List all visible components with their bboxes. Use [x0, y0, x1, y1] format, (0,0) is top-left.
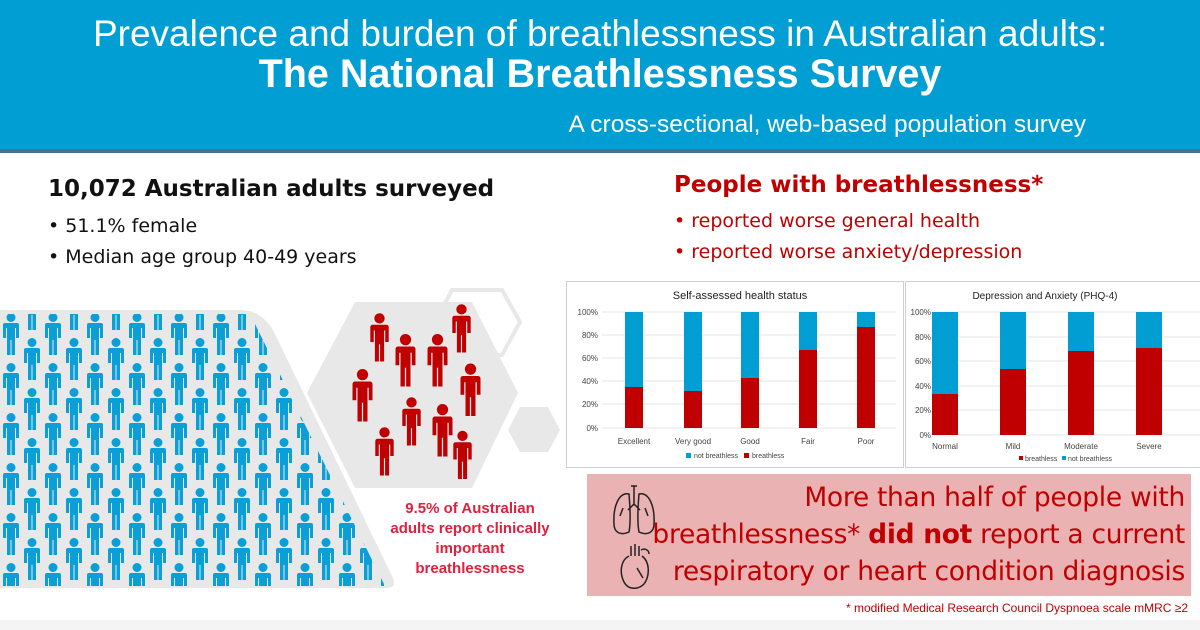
title: Prevalence and burden of breathlessness in Australian adults:: [93, 13, 1107, 54]
chart: depression and anxiety: 20%: [915, 406, 931, 415]
callout: 9.5%: breathlessness: [415, 560, 525, 577]
chart: depression and anxiety: Normal: [932, 442, 958, 451]
chart: depression and anxiety: 0%: [919, 431, 931, 440]
chart: self-assessed health status: Self-assessed health status: [673, 290, 808, 302]
callout: 9.5%: important: [435, 540, 505, 557]
icon: lungs: [613, 485, 655, 534]
text block: survey sample: [48, 176, 494, 268]
chart: self-assessed health status: Excellent: [618, 437, 651, 446]
crowd illustration: [0, 288, 560, 588]
icon: heart: [620, 544, 650, 589]
chart: depression and anxiety: Severe: [1136, 442, 1162, 451]
text block: survey sample: • 51.1% female: [48, 215, 197, 237]
chart: depression and anxiety: Mild: [1006, 442, 1020, 451]
red figures: [352, 304, 480, 479]
chart: self-assessed health status: breathless: [752, 453, 785, 460]
chart: depression and anxiety: 100%: [911, 308, 931, 317]
text block: survey sample: • Median age group 40-49 years: [48, 246, 357, 268]
chart: self-assessed health status: 40%: [582, 377, 598, 386]
chart: depression and anxiety: 80%: [915, 333, 931, 342]
subtitle: A cross-sectional, web-based population survey: [568, 111, 1086, 138]
chart: self-assessed health status: [566, 281, 904, 468]
callout text: breathlessness* did not report a current: [652, 519, 1185, 550]
blue figures: [0, 314, 385, 586]
footnote: * modified Medical Research Council Dyspnoea scale mMRC ≥2: [846, 601, 1188, 615]
chart: self-assessed health status: 60%: [582, 354, 598, 363]
chart: self-assessed health status: 0%: [586, 424, 598, 433]
chart: depression and anxiety: Moderate: [1064, 442, 1098, 451]
chart: self-assessed health status: Good: [740, 437, 760, 446]
bottom strip: [0, 620, 1200, 630]
chart: depression and anxiety: [905, 281, 1200, 468]
callout: 9.5%: [390, 500, 550, 577]
text block: people with breathlessness: • reported worse general health: [674, 210, 980, 232]
header banner: [0, 0, 1200, 153]
callout text: [652, 482, 1185, 587]
chart: depression and anxiety: 40%: [915, 382, 931, 391]
chart: depression and anxiety: 60%: [915, 357, 931, 366]
text block: people with breathlessness: • reported worse anxiety/depression: [674, 241, 1022, 263]
chart: self-assessed health status: Very good: [675, 437, 711, 446]
text block: people with breathlessness: People with breathlessness*: [674, 172, 1043, 198]
text block: survey sample: 10,072 Australian adults surveyed: [48, 176, 494, 202]
chart: self-assessed health status: not breathless: [694, 453, 738, 460]
chart: self-assessed health status: Fair: [801, 437, 815, 446]
hexagons: [307, 290, 560, 488]
title: The National Breathlessness Survey: [259, 52, 941, 96]
chart: depression and anxiety: not breathless: [1068, 456, 1112, 463]
text block: people with breathlessness: [674, 172, 1043, 263]
callout: 9.5%: adults report clinically: [390, 520, 550, 537]
chart: self-assessed health status: 100%: [578, 308, 598, 317]
callout text: More than half of people with: [804, 482, 1185, 513]
chart: depression and anxiety: Depression and Anxiety (PHQ-4): [972, 291, 1118, 302]
title: [93, 13, 1107, 96]
callout box: diagnosis: [587, 474, 1191, 596]
callout: 9.5%: 9.5% of Australian: [405, 500, 535, 517]
gray background shape: [0, 310, 394, 588]
chart: self-assessed health status: Poor: [858, 437, 875, 446]
chart: self-assessed health status: 80%: [582, 331, 598, 340]
chart: self-assessed health status: 20%: [582, 400, 598, 409]
callout text: respiratory or heart condition diagnosis: [673, 556, 1185, 587]
chart: depression and anxiety: breathless: [1025, 456, 1058, 463]
